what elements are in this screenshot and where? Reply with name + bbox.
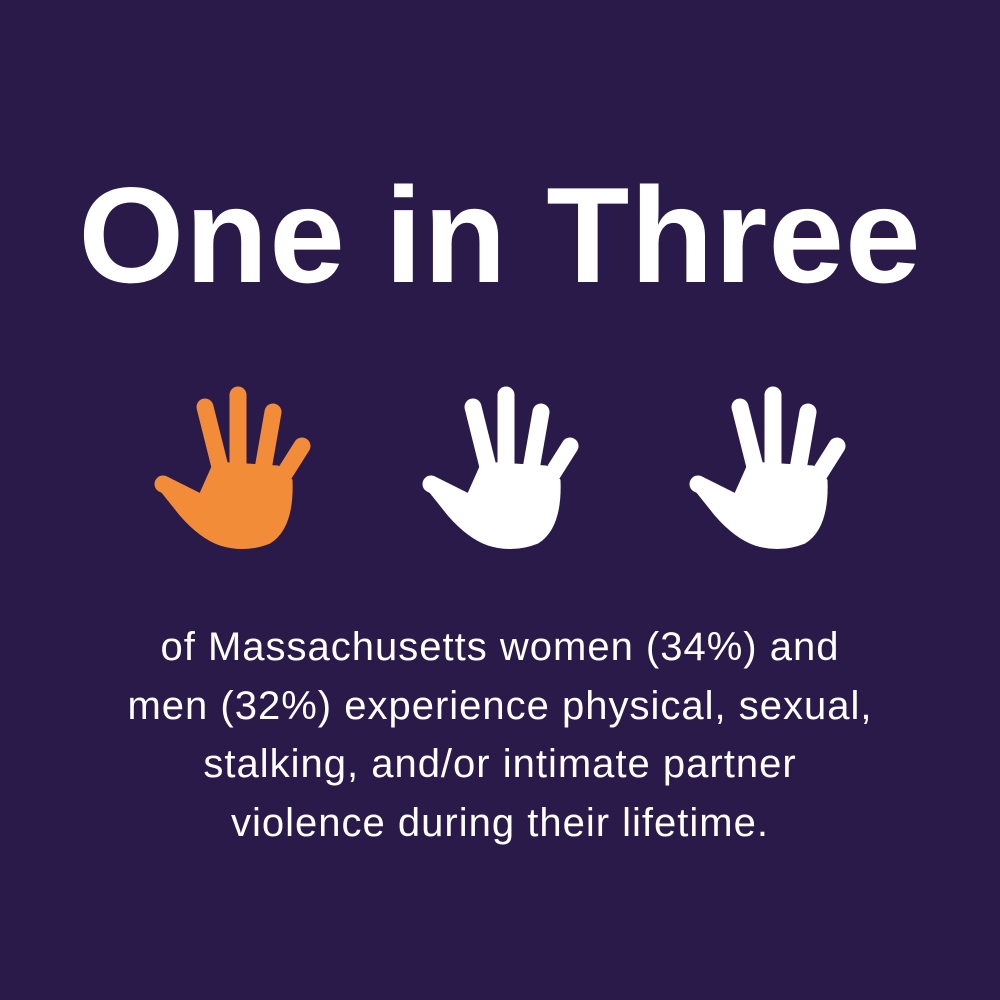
body text: of Massachusetts women (34%) and <box>160 625 839 669</box>
body text: men (32%) experience physical, sexual, <box>127 684 872 728</box>
body text: stalking, and/or intimate partner <box>203 742 797 786</box>
icon: orange hand <box>160 395 302 549</box>
icon: white hand 2 <box>428 395 570 549</box>
body text: violence during their lifetime. <box>231 800 769 844</box>
title: One in Three <box>78 159 922 311</box>
icon: white hand 3 <box>695 395 837 549</box>
body text <box>127 625 872 844</box>
